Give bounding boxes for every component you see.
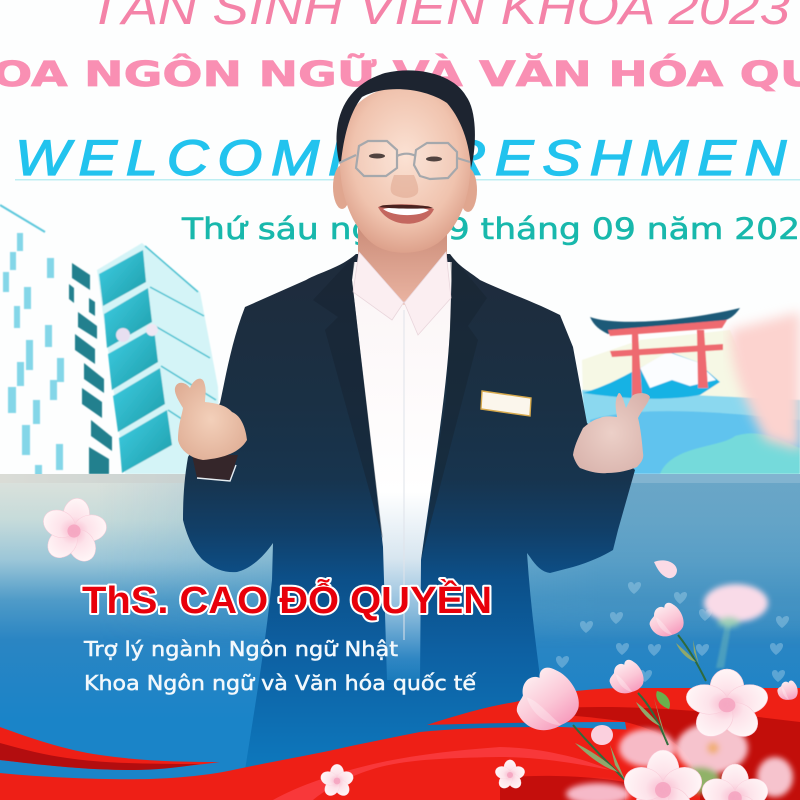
backdrop date: Thứ sáu ngày 29 tháng 09 năm 2023: [181, 212, 800, 246]
flower: top left blossom: [34, 494, 113, 570]
ribbon: lower main: [0, 727, 800, 800]
backdrop illustration: torii gate and mountain: [582, 308, 800, 474]
smile: [378, 204, 434, 224]
neck: [358, 220, 447, 305]
name badge: [481, 391, 531, 416]
scattered hearts: [556, 582, 789, 682]
eyes and brows: [369, 154, 442, 162]
backdrop screen edge band: [0, 474, 800, 483]
stem leaves: [575, 640, 699, 780]
blurred blossoms lower right: [566, 723, 793, 800]
right hand: [573, 393, 650, 473]
leaf: [656, 691, 670, 709]
name heading: ThS. CAO ĐỖ QUYỀN: [82, 577, 492, 622]
backdrop divider line: [15, 179, 800, 180]
red ribbons: [0, 688, 800, 800]
flower branches: [573, 635, 706, 785]
person: [175, 70, 650, 770]
backdrop heading: welcome freshmen: WELCOME FRESHMEN: [15, 131, 787, 186]
background: [0, 483, 800, 780]
backdrop illustration: white building: [0, 205, 112, 475]
tulips: [505, 599, 800, 745]
ribbon: upper right: [427, 688, 800, 800]
faculty line: Khoa Ngôn ngữ và Văn hóa quốc tế: [84, 671, 477, 695]
suit jacket: [183, 254, 635, 770]
falling petal: [654, 560, 677, 578]
face: [340, 86, 470, 253]
ribbon: dark folds: [520, 707, 800, 800]
left hand: [175, 379, 247, 460]
role line: Trợ lý ngành Ngôn ngữ Nhật: [83, 637, 398, 661]
nose: [391, 175, 418, 198]
ribbon: left swoosh: [0, 727, 220, 770]
backdrop illustration: blurred blossom: [730, 312, 800, 450]
ribbon: highlight stripe: [273, 747, 610, 800]
shirt: [352, 262, 452, 680]
left wrist and cuff: [192, 455, 238, 481]
hair: [336, 70, 475, 168]
collar: [353, 252, 451, 335]
glasses: [339, 141, 470, 179]
jacket lapels: [313, 254, 383, 540]
blurred blossom upper right: [704, 584, 768, 668]
ears: [333, 165, 351, 209]
backdrop illustration: teal glass building: [97, 243, 220, 474]
cherry blossoms: [319, 669, 772, 800]
